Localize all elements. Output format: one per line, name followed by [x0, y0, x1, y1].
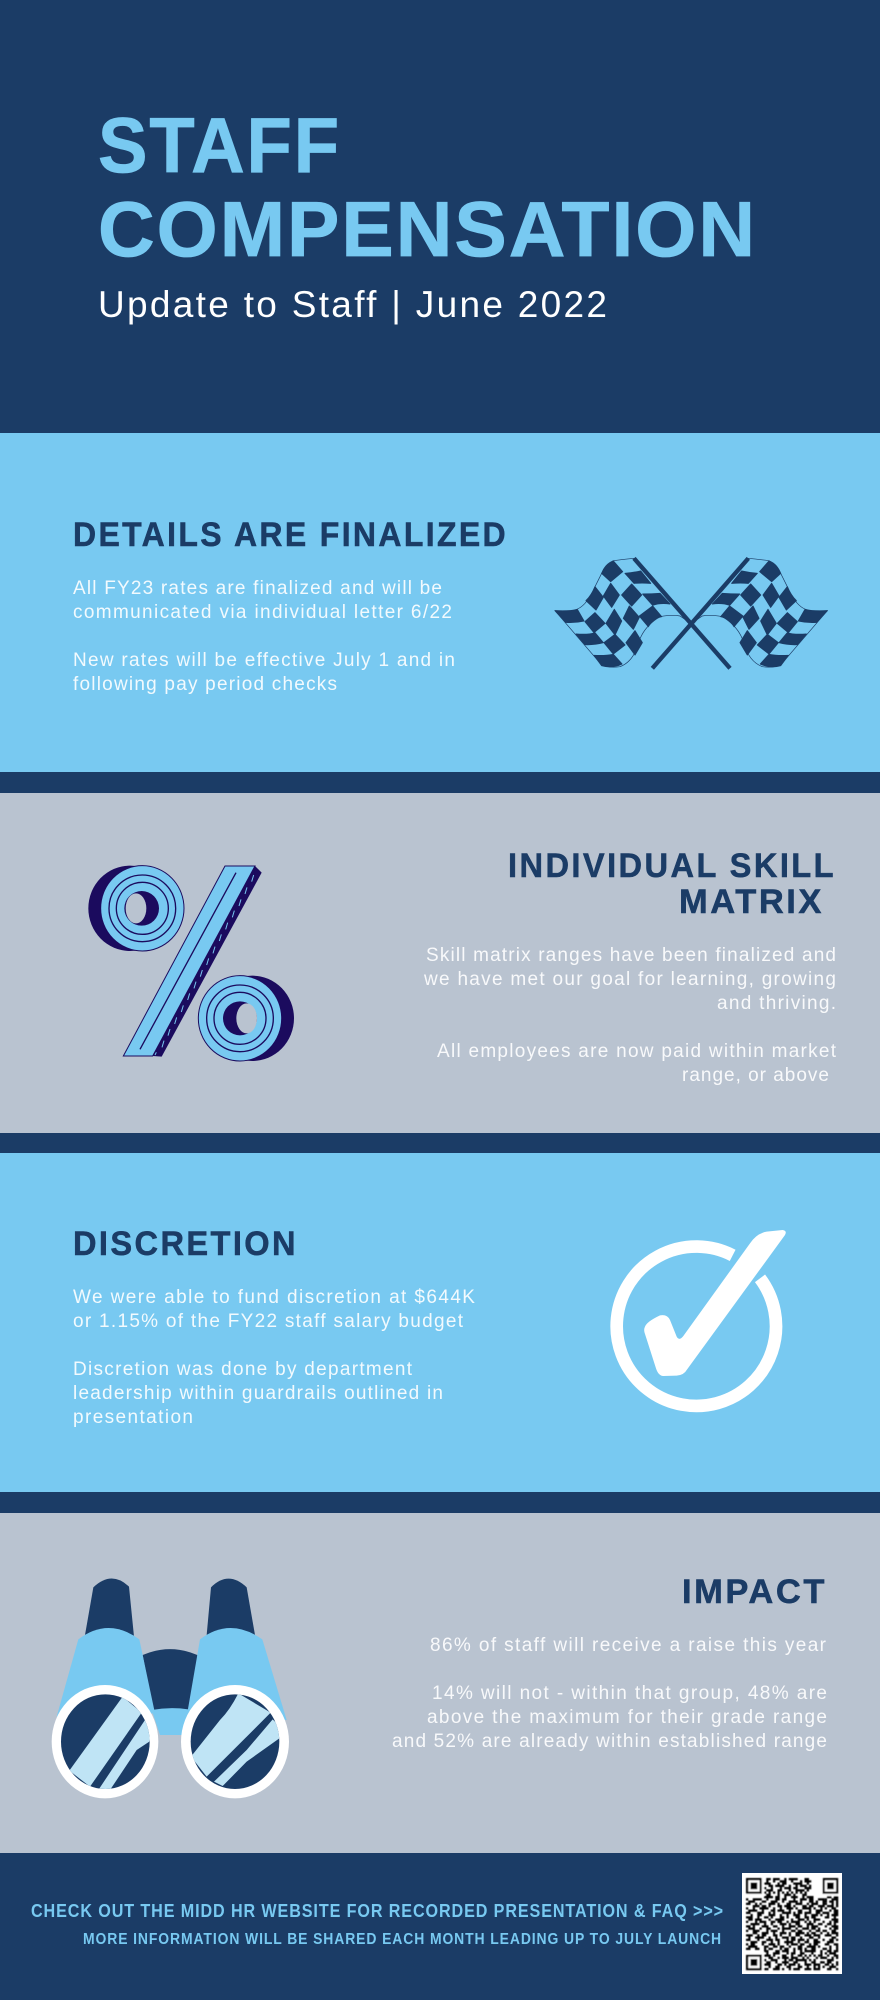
heading	[508, 847, 836, 921]
body text	[73, 1287, 475, 1428]
body text: range, or above	[682, 1065, 829, 1086]
body text: presentation	[73, 1407, 193, 1428]
body text: Discretion was done by department	[73, 1359, 413, 1380]
icon: percent sign	[88, 866, 294, 1061]
title: COMPENSATION	[98, 185, 757, 273]
heading: INDIVIDUAL SKILL	[508, 847, 836, 885]
panel: details are finalized	[0, 433, 880, 772]
heading: IMPACT	[682, 1573, 827, 1611]
body text: leadership within guardrails outlined in	[73, 1383, 443, 1404]
body text: 14% will not - within that group, 48% are	[432, 1683, 827, 1704]
body text: All employees are now paid within market	[437, 1041, 837, 1062]
heading: DETAILS ARE FINALIZED	[73, 516, 508, 554]
footer panel	[31, 1873, 842, 1974]
panel: discretion	[0, 1153, 880, 1492]
body text: New rates will be effective July 1 and in	[73, 650, 455, 671]
panel background	[0, 433, 880, 772]
panel: impact	[0, 1513, 880, 1853]
body text: We were able to fund discretion at $644K	[73, 1287, 475, 1308]
footer call to action: CHECK OUT THE MIDD HR WEBSITE FOR RECORDED PRESENTATION & FAQ >>>	[31, 1901, 724, 1921]
icon: crossed checkered flags	[555, 558, 827, 668]
body text: following pay period checks	[73, 674, 337, 695]
QR code	[742, 1873, 842, 1974]
panel: individual skill matrix	[0, 793, 880, 1133]
heading: MATRIX	[679, 883, 824, 921]
body text: communicated via individual letter 6/22	[73, 602, 452, 623]
icon: check mark in circle	[617, 1230, 786, 1406]
subtitle: Update to Staff | June 2022	[98, 284, 607, 325]
body text: we have met our goal for learning, growing	[423, 969, 836, 990]
panel background	[0, 1153, 880, 1492]
body text: Skill matrix ranges have been finalized and	[426, 945, 836, 966]
title	[98, 101, 757, 273]
body text	[73, 578, 455, 695]
header panel	[98, 101, 757, 325]
panel background	[0, 793, 880, 1133]
title: STAFF	[98, 101, 341, 189]
panel background	[0, 1513, 880, 1853]
body text	[392, 1635, 827, 1752]
footer note: MORE INFORMATION WILL BE SHARED EACH MONTH LEADING UP TO JULY LAUNCH	[83, 1931, 722, 1948]
body text: and 52% are already within established range	[392, 1731, 827, 1752]
icon: binoculars	[52, 1578, 289, 1798]
body text: and thriving.	[717, 993, 836, 1014]
body text: above the maximum for their grade range	[427, 1707, 827, 1728]
body text: 86% of staff will receive a raise this year	[430, 1635, 827, 1656]
body text	[423, 945, 837, 1086]
body text: or 1.15% of the FY22 staff salary budget	[73, 1311, 464, 1332]
body text: All FY23 rates are finalized and will be	[73, 578, 442, 599]
heading: DISCRETION	[73, 1225, 298, 1263]
